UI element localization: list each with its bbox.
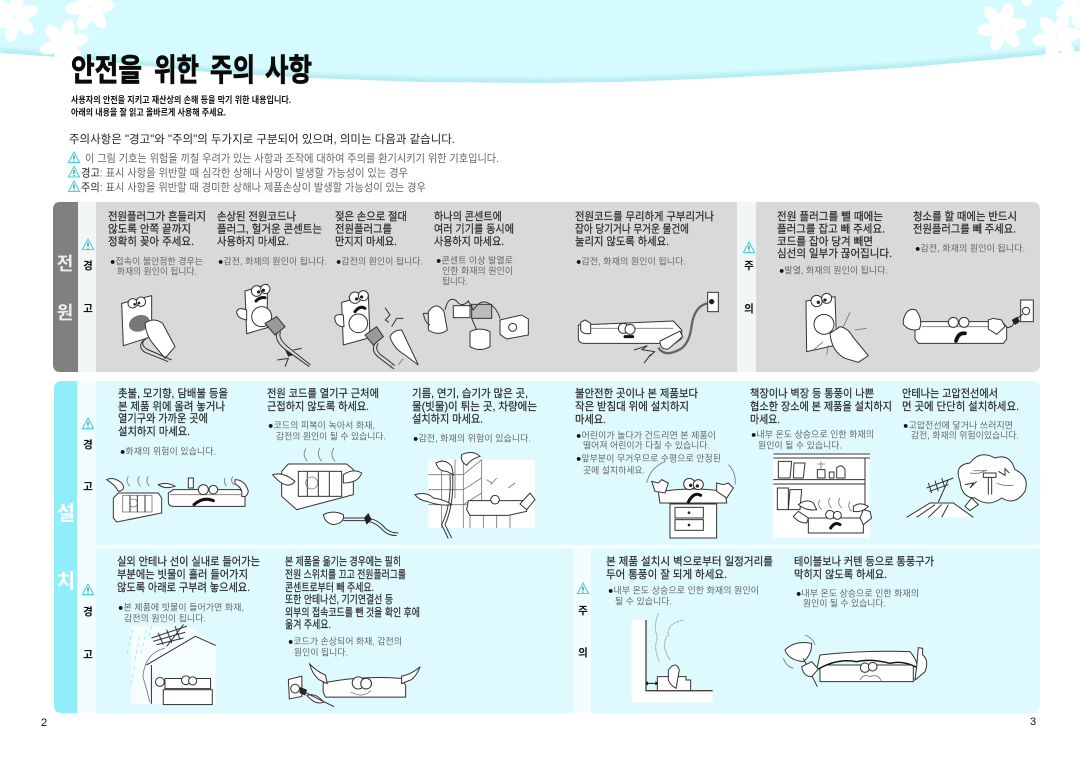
text: unplugging: ●발열, 화재의 원인이 됩니다. xyxy=(779,266,888,276)
subtitle: 아래의 내용을 잘 읽고 올바르게 사용해 주세요. xyxy=(71,106,226,118)
text: cord near heater: 근접하지 않도록 하세요. xyxy=(267,399,369,413)
header wave background xyxy=(0,0,1080,100)
warning marker: power: 경 xyxy=(83,260,93,272)
text: oil and humidity: 물(빗물)이 튀는 곳, 차량에는 xyxy=(412,400,537,413)
illustrations: installation upper left xyxy=(107,448,535,539)
text: outdoor antenna wire: 않도록 아래로 구부려 놓으세요. xyxy=(117,581,250,594)
symbol legend xyxy=(68,151,499,194)
text: plug fully inserted: 정확히 꽂아 주세요. xyxy=(108,234,194,248)
text: bending cord xyxy=(575,209,714,266)
page number right: 3 xyxy=(1030,716,1036,728)
text: distance from wall: 될 수 있습니다. xyxy=(615,596,672,606)
text: outdoor antenna wire: 감전의 원인이 됩니다. xyxy=(124,612,206,624)
text: unstable place: 마세요. xyxy=(575,413,606,426)
text: moving the unit: 본 제품을 옮기는 경우에는 필히 xyxy=(285,554,401,568)
illustrations: installation lower left xyxy=(127,624,420,707)
illustrations: power right xyxy=(578,292,1033,363)
text: one outlet: ●콘센트 이상 발열로 xyxy=(436,256,513,266)
text: moving the unit: 외부의 접속코드를 뺀 것을 확인 후에 xyxy=(285,606,420,619)
text: plug fully inserted: 않도록 안쪽 끝까지 xyxy=(108,222,191,236)
icon: antenna on house in rain xyxy=(127,624,216,705)
text: wet hands: 전원플러그를 xyxy=(335,222,392,236)
text: candles: 촛불, 모기향, 담배불 등을 xyxy=(118,387,228,400)
warning marker: upper xyxy=(82,418,94,493)
text: cord near heater xyxy=(267,387,386,442)
icon: cramped shelf xyxy=(773,453,872,538)
text: distance from wall: 두어 통풍이 잘 되게 하세요. xyxy=(606,567,727,581)
icon: falling nightstand xyxy=(647,461,735,538)
warning marker: lower: 경 xyxy=(83,606,93,618)
text: unstable place: ●앞부분이 무거우므로 수평으로 안정된 xyxy=(576,452,721,464)
icon: unit on bent cord xyxy=(578,292,718,363)
text: one outlet xyxy=(434,209,514,286)
text: unplugging xyxy=(777,210,892,276)
text: moving the unit xyxy=(285,554,420,658)
title xyxy=(71,53,312,88)
text: moving the unit: 원인이 됩니다. xyxy=(294,648,348,658)
text: cleaning xyxy=(913,210,1025,254)
text: cord near heater: ●코드의 피복이 녹아서 화재, xyxy=(268,420,375,430)
icon: antenna and high voltage xyxy=(907,455,1026,517)
text: outdoor antenna wire xyxy=(117,555,260,624)
text: wet hands: ●감전의 원인이 됩니다. xyxy=(336,256,423,266)
text: one outlet: 인한 화재의 원인이 xyxy=(442,266,513,276)
text: candles: ●화재의 위험이 있습니다. xyxy=(120,446,216,456)
text: bending cord: 전원코드를 무리하게 구부리거나 xyxy=(575,209,714,223)
text: unstable place xyxy=(575,387,721,476)
text: outdoor antenna wire: 부분에는 빗물이 흘러 들어가지 xyxy=(117,568,248,581)
text: candles: 설치하지 마세요. xyxy=(118,424,190,438)
title: 사항 xyxy=(265,53,312,88)
text: covered vents: 막히지 않도록 하세요. xyxy=(794,567,887,581)
heading: power: 원 xyxy=(57,303,73,323)
icon: damaged cord xyxy=(237,284,311,367)
illustrations: installation lower right xyxy=(632,613,927,702)
icon: overloaded outlet xyxy=(423,299,528,349)
flowers left xyxy=(0,0,123,75)
page number left: 2 xyxy=(41,717,47,729)
title: 위한 xyxy=(154,53,199,88)
text: antenna: 안테나는 고압전선에서 xyxy=(902,387,998,400)
text: wet hands: 젖은 손으로 절대 xyxy=(335,210,407,223)
warning marker: upper: 경 xyxy=(83,439,93,451)
text: antenna xyxy=(902,387,1019,440)
text: oil and humidity: 설치하지 마세요. xyxy=(412,412,483,426)
icon: wall clearance xyxy=(632,613,713,702)
text: poor ventilation: 원인이 될 수 있습니다. xyxy=(758,440,842,450)
text: oil and humidity: ●감전, 화재의 위험이 있습니다. xyxy=(413,432,531,444)
text: one outlet: 됩니다. xyxy=(442,276,468,286)
text: unplugging: 플러그를 잡고 빼 주세요. xyxy=(777,222,885,236)
warning marker: lower: 고 xyxy=(83,649,93,661)
caution marker: lower xyxy=(578,583,588,659)
panel: lower caution xyxy=(573,548,1040,713)
text: bending cord: 잡아 당기거나 무거운 물건에 xyxy=(575,222,689,236)
text: damaged cord: 플러그, 헐거운 콘센트는 xyxy=(217,222,322,236)
subtitle xyxy=(71,94,291,118)
text: poor ventilation xyxy=(750,387,892,450)
text: covered vents: ●내부 온도 상승으로 인한 화재의 xyxy=(796,588,919,598)
title: 안전을 xyxy=(71,53,142,88)
icon: heater and melted cord xyxy=(273,448,398,536)
text: damaged cord xyxy=(217,210,327,266)
icon: wet hand and plug xyxy=(335,291,418,369)
text: bending cord: 눌리지 않도록 하세요. xyxy=(575,234,669,248)
text: distance from wall: ●내부 온도 상승으로 인한 화재의 원인이 xyxy=(608,586,759,596)
icon: covered unit and fan xyxy=(783,635,927,687)
text: outdoor antenna wire: 실외 안테나 선이 실내로 들어가는 xyxy=(117,555,260,568)
text: antenna: 먼 곳에 단단히 설치하세요. xyxy=(902,399,1019,413)
text: cleaning: 전원플러그를 빼 주세요. xyxy=(913,222,1016,236)
caution marker: lower: 주 xyxy=(578,605,588,617)
icon: heater and unit xyxy=(107,476,248,522)
text: unstable place: ●어린이가 놀다가 건드리면 본 제품이 xyxy=(576,430,716,440)
text: oil and humidity xyxy=(412,387,537,444)
text: one outlet: 하나의 콘센트에 xyxy=(434,209,502,223)
panel: installation warning xyxy=(54,381,1040,713)
text: distance from wall: 본 제품 설치시 벽으로부터 일정거리를 xyxy=(606,554,773,568)
text: damaged cord: 손상된 전원코드나 xyxy=(217,210,296,223)
text: antenna: ●고압전선에 닿거나 쓰러지면 xyxy=(903,420,1013,430)
text: unstable place: 작은 받침대 위에 설치하지 xyxy=(575,399,689,413)
panel: power section xyxy=(53,202,1040,372)
flowers right xyxy=(970,0,1080,69)
text: poor ventilation: 협소한 장소에 본 제품을 설치하지 xyxy=(750,399,892,413)
text: candles: 열기구와 가까운 곳에 xyxy=(118,412,208,425)
heading: power xyxy=(57,254,73,323)
heading: installation xyxy=(57,502,75,593)
intro sentence: 주의사항은 "경고"와 "주의"의 두가지로 구분되어 있으며, 의미는 다음과 같습니다. xyxy=(69,132,455,146)
text: candles xyxy=(118,387,228,456)
text: candles: 본 제품 위에 올려 놓거나 xyxy=(118,400,225,413)
text: damaged cord: ●감전, 화재의 원인이 됩니다. xyxy=(218,256,327,266)
text: antenna: 감전, 화재의 위험이있습니다. xyxy=(911,430,1019,440)
heading: power: 전 xyxy=(57,254,73,274)
text: moving the unit: 전원 스위치를 끄고 전원플러그를 xyxy=(285,568,406,581)
text: oil and humidity: 기름, 연기, 습기가 많은 곳, xyxy=(412,387,528,400)
text: cord near heater: 감전의 원인이 될 수 있습니다. xyxy=(276,430,386,442)
icon: moving the unit xyxy=(288,664,420,707)
text: unplugging: 전원 플러그를 뺄 때에는 xyxy=(777,210,883,223)
text: covered vents: 테이블보나 커텐 등으로 통풍구가 xyxy=(794,555,934,568)
text: plug fully inserted: ●접속이 불안정한 경우는 xyxy=(110,256,203,266)
text: one outlet: 사용하지 마세요. xyxy=(434,234,504,248)
text: wet hands xyxy=(335,210,423,266)
title: 주의 xyxy=(210,53,255,88)
text: cleaning: 청소를 할 때에는 반드시 xyxy=(913,210,1017,223)
warning marker: power: 고 xyxy=(83,303,93,315)
subtitle: 사용자의 안전을 지키고 재산상의 손해 등을 막기 위한 내용입니다. xyxy=(71,94,291,105)
caution marker: power: 의 xyxy=(744,303,754,315)
text: covered vents: 원인이 될 수 있습니다. xyxy=(803,598,886,608)
text: wet hands: 만지지 마세요. xyxy=(335,235,397,248)
text: moving the unit: 옮겨 주세요. xyxy=(285,618,331,631)
icon: unit being cleaned xyxy=(903,300,1033,343)
text: unplugging: 심선의 일부가 끊어집니다. xyxy=(777,246,892,260)
symbol legend: 주의: 표시 사항을 위반할 때 경미한 상해나 제품손상이 발생할 가능성이 있는 경우 xyxy=(81,180,426,194)
text: unstable place: 곳에 설치하세요. xyxy=(583,464,645,476)
text: cord near heater: 전원 코드를 열기구 근처에 xyxy=(267,387,379,400)
text: plug fully inserted: 화재의 원인이 됩니다. xyxy=(117,266,197,276)
text: one outlet: 여러 기기를 동시에 xyxy=(434,222,514,236)
text: unstable place: 떨어져 어린이가 다칠 수 있습니다. xyxy=(583,440,710,450)
heading: installation: 설 xyxy=(57,502,75,525)
caution marker: lower: 의 xyxy=(578,647,588,659)
text: covered vents xyxy=(794,555,934,608)
text: poor ventilation: 마세요. xyxy=(750,413,780,426)
panel: lower warning xyxy=(96,548,573,713)
text: plug fully inserted xyxy=(108,210,206,276)
text: outdoor antenna wire: ●본 제품에 빗물이 들어가면 화재, xyxy=(118,602,244,612)
text: bending cord: ●감전, 화재의 원인이 됩니다. xyxy=(576,256,686,266)
text: plug fully inserted: 전원플러그가 흔들리지 xyxy=(108,210,206,223)
icon: hand pulling plug xyxy=(806,293,868,362)
icon: bathroom xyxy=(415,453,535,539)
symbol legend: 이 그림 기호는 위험을 끼칠 우려가 있는 사항과 조작에 대하여 주의를 환기시키기 위한 기호입니다. xyxy=(85,151,499,165)
text: moving the unit: 콘센트로부터 빼 주세요. xyxy=(285,581,374,594)
text: poor ventilation: 책장이나 벽장 등 통풍이 나쁜 xyxy=(750,387,874,400)
text: unplugging: 코드를 잡아 당겨 빼면 xyxy=(777,235,873,248)
text: unstable place: 불안전한 곳이나 본 제품보다 xyxy=(575,387,698,400)
illustrations: installation upper right xyxy=(647,453,1026,538)
text: moving the unit: ●코드가 손상되어 화재, 감전의 xyxy=(288,636,402,646)
text: damaged cord: 사용하지 마세요. xyxy=(217,234,289,248)
illustrations: power left xyxy=(122,284,528,369)
caution marker: power xyxy=(744,242,754,315)
text: poor ventilation: ●내부 온도 상승으로 인한 화재의 xyxy=(751,430,874,440)
text: distance from wall xyxy=(606,554,773,606)
warning marker: lower xyxy=(82,584,94,661)
heading: installation: 치 xyxy=(57,570,75,593)
caution marker: power: 주 xyxy=(744,260,754,272)
icon: plug pushed into wall xyxy=(122,296,175,362)
symbol legend: 경고: 표시 사항을 위반할 때 심각한 상해나 사망이 발생할 가능성이 있는 경우 xyxy=(81,166,408,180)
warning marker: power xyxy=(82,239,94,315)
text: cleaning: ●감전, 화재의 원인이 됩니다. xyxy=(915,242,1025,254)
text: moving the unit: 또한 안테나선, 기기연결선 등 xyxy=(285,593,393,606)
warning marker: upper: 고 xyxy=(83,481,93,493)
